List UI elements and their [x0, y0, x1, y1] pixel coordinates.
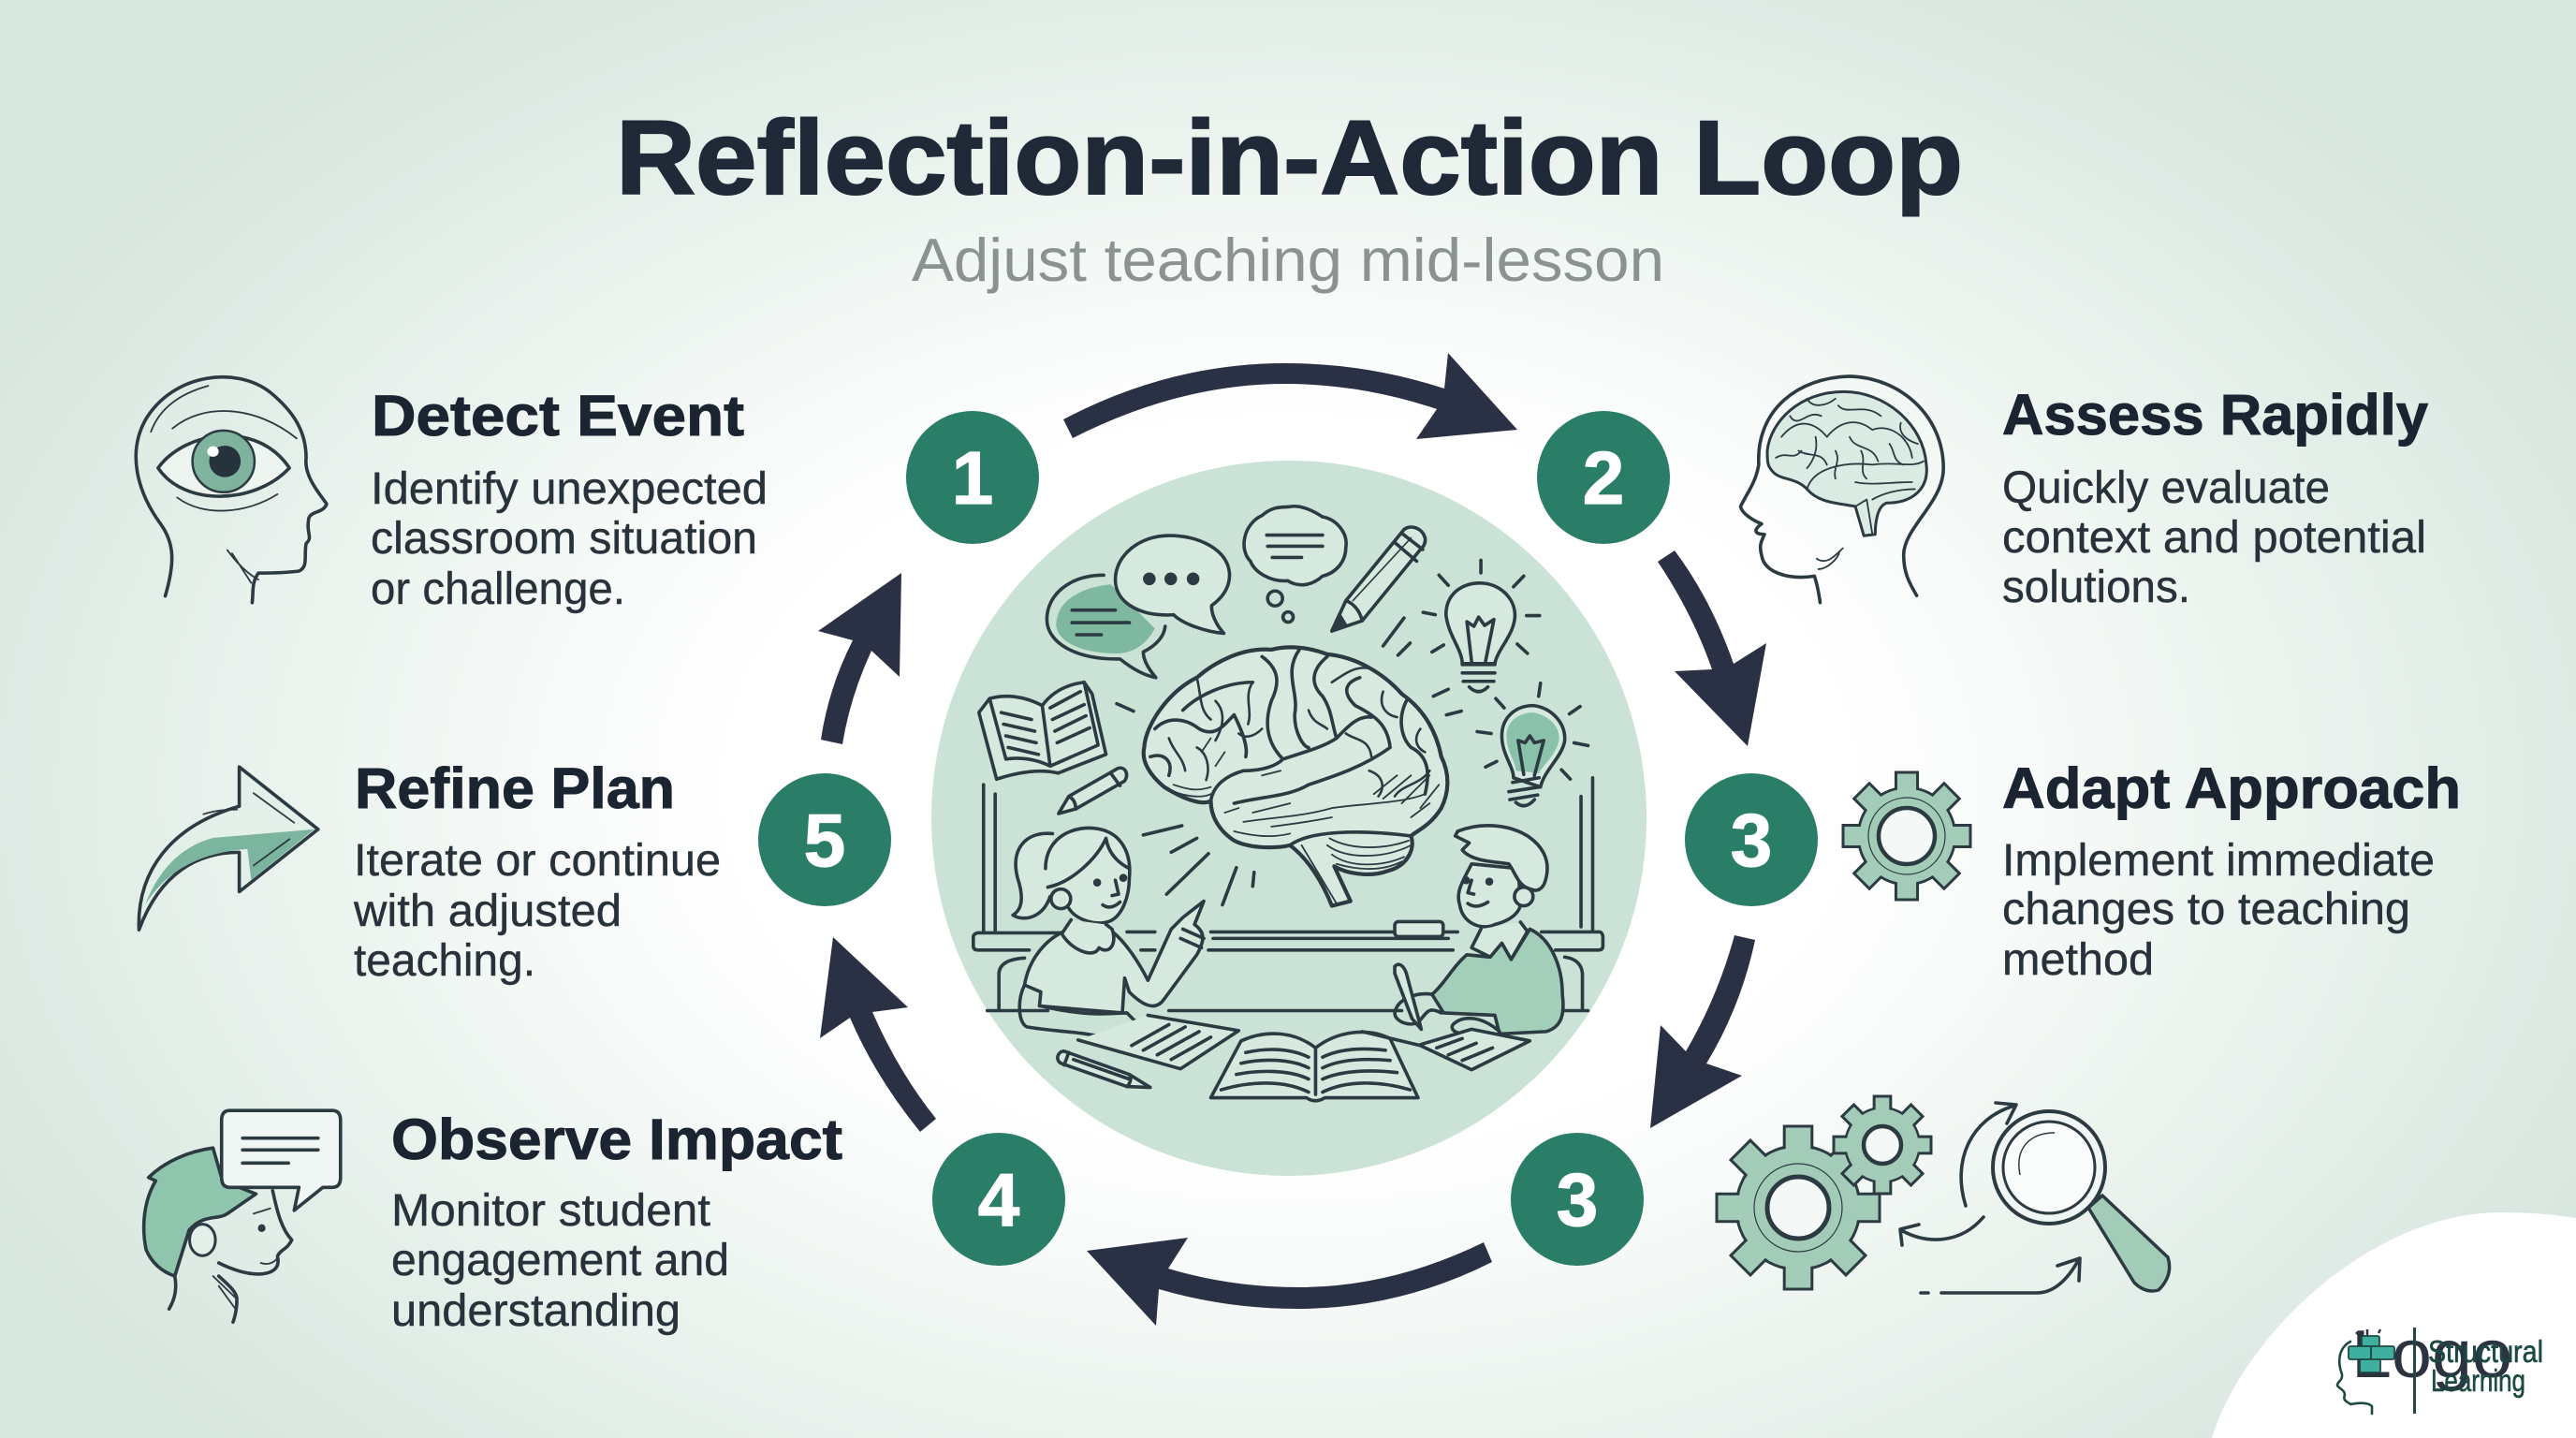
panel: detect event — [136, 377, 768, 614]
large pencil — [1332, 527, 1426, 631]
logo mark: head and blocks — [2337, 1329, 2394, 1414]
arrow 3 to 3 — [1650, 935, 1755, 1128]
step number 4 — [932, 1133, 1065, 1266]
central illustration — [931, 461, 1647, 1176]
step number 3 — [1685, 773, 1818, 906]
icon: head with speech bubble — [144, 1110, 341, 1322]
description: Identify unexpected — [371, 464, 768, 514]
heading: Observe Impact — [391, 1108, 842, 1171]
step number 2 — [1537, 411, 1670, 544]
arrow 4 to 5 — [820, 937, 936, 1132]
icon: gears and magnifier — [1717, 1096, 2170, 1293]
description: with adjusted — [353, 887, 622, 936]
large gear — [1717, 1126, 1880, 1289]
small gear — [1834, 1096, 1931, 1194]
heading: Detect Event — [372, 384, 744, 448]
whiteboard and desk lines — [973, 778, 1603, 1010]
description — [2002, 463, 2426, 612]
icon: head with eye — [136, 377, 327, 603]
step number 1 — [906, 411, 1039, 544]
step number 1: 1 — [952, 436, 993, 520]
arrow 3 to 4 — [1087, 1238, 1492, 1326]
description: engagement and — [391, 1236, 729, 1285]
notebook paper — [1078, 1015, 1238, 1069]
speech bubbles — [1046, 536, 1230, 678]
description: Iterate or continue — [354, 836, 721, 886]
icon: head with brain — [1740, 376, 1943, 603]
description: Monitor student — [391, 1186, 710, 1236]
heading: Assess Rapidly — [2002, 383, 2428, 447]
panel: observe impact — [144, 1108, 842, 1336]
classroom drawing — [973, 506, 1603, 1101]
panel: refine plan — [139, 756, 721, 986]
magnifier — [1993, 1111, 2170, 1291]
idea rays — [1143, 826, 1254, 905]
open book — [979, 682, 1106, 779]
central brain — [1144, 647, 1447, 906]
description: Implement immediate — [2002, 836, 2435, 886]
step number 3: 3 — [1731, 799, 1772, 882]
description — [371, 464, 768, 614]
boy student — [1395, 826, 1563, 1035]
girl student — [1013, 828, 1204, 1039]
step number 5 — [758, 773, 891, 906]
small pencil — [1059, 768, 1126, 814]
logo divider — [2413, 1328, 2416, 1414]
description: teaching. — [354, 936, 535, 986]
logo wordmark: Structural — [2428, 1334, 2543, 1369]
step number 2: 2 — [1583, 436, 1624, 520]
description: Quickly evaluate — [2002, 463, 2330, 513]
arrow 5 to 1 — [818, 573, 901, 744]
description — [353, 836, 721, 986]
open book on desk — [1211, 1032, 1418, 1101]
step number 4: 4 — [978, 1158, 1020, 1241]
central mint circle — [931, 461, 1647, 1176]
logo placeholder word: Logo — [2351, 1317, 2512, 1392]
arrow 1 to 2 — [1063, 353, 1517, 439]
pencil on desk — [1058, 1051, 1150, 1088]
logo — [2337, 1317, 2543, 1414]
icon: curved arrow — [139, 767, 318, 930]
boy's notebook — [1362, 1029, 1530, 1070]
loop arrows — [818, 353, 1766, 1326]
heading: Adapt Approach — [2002, 756, 2461, 820]
green light bulb — [1117, 683, 1588, 806]
step number 5: 5 — [804, 799, 845, 882]
description — [391, 1186, 729, 1336]
icon: gear — [1843, 772, 1970, 900]
panel: adapt approach — [1843, 756, 2461, 985]
panel: assess rapidly — [1740, 376, 2428, 612]
step number 3 lower — [1511, 1133, 1644, 1266]
light bulb outline — [1383, 560, 1540, 692]
arrow 2 to 3 — [1658, 550, 1766, 746]
thought cloud — [1244, 506, 1346, 623]
description: changes to teaching — [2002, 885, 2410, 934]
title: Reflection-in-Action Loop — [616, 99, 1963, 216]
logo corner panel — [2212, 1212, 2576, 1438]
logo wordmark: Learning — [2431, 1363, 2525, 1398]
description — [2002, 836, 2435, 985]
description: method — [2002, 935, 2154, 985]
description: classroom situation — [371, 514, 757, 564]
subtitle: Adjust teaching mid-lesson — [912, 226, 1664, 294]
logo wordmark — [2428, 1334, 2543, 1398]
heading: Refine Plan — [355, 756, 675, 820]
step number 3 lower: 3 — [1557, 1158, 1598, 1241]
description: understanding — [391, 1286, 681, 1336]
description: or challenge. — [371, 565, 625, 614]
description: solutions. — [2002, 563, 2190, 612]
cycle arrows — [1900, 1103, 2080, 1293]
description: context and potential — [2002, 513, 2426, 563]
